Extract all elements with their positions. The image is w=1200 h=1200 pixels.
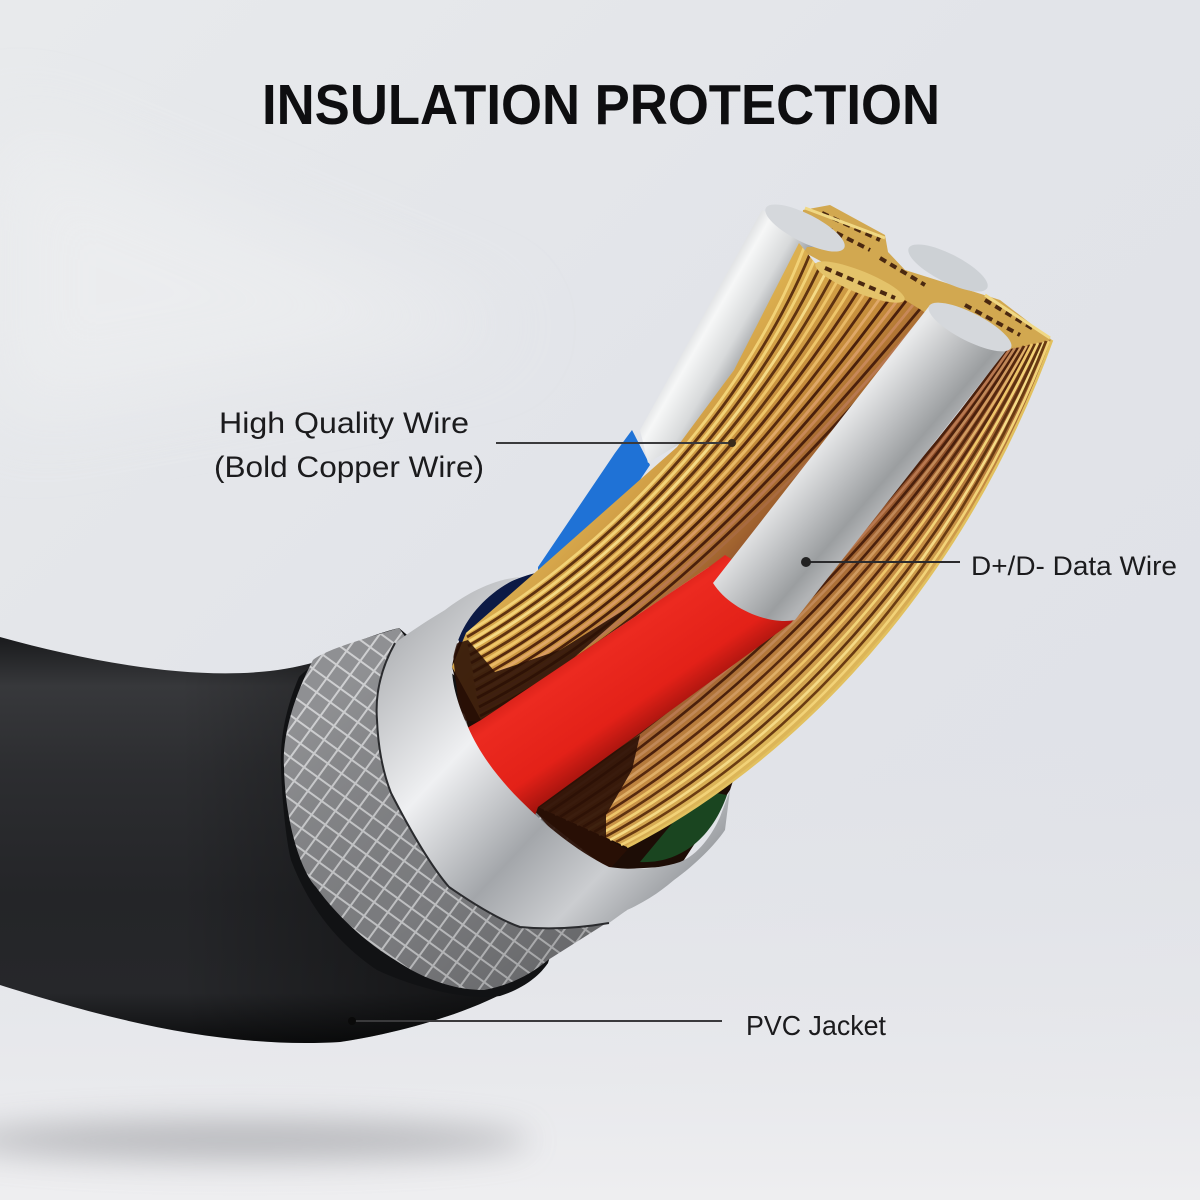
- dark ring behind braid: [281, 628, 600, 997]
- blue wire: [538, 430, 650, 580]
- cable illustration: [0, 196, 1052, 1043]
- rear silver conductor: [902, 236, 994, 300]
- silver collar front: [377, 577, 730, 928]
- PVC jacket: [0, 628, 548, 1043]
- dark shadow at opening: [452, 600, 640, 722]
- rear copper tips: [800, 205, 1052, 352]
- data wire silver conductor: [713, 294, 1017, 621]
- leader line: [806, 561, 960, 563]
- title: INSULATION PROTECTION: [262, 73, 940, 137]
- label: data wire: D+/D- Data Wire: [971, 551, 1177, 581]
- main copper bundle: high quality wire: [452, 243, 942, 722]
- front copper bundle: [530, 340, 1052, 870]
- red wire: [455, 555, 805, 830]
- upper silver conductor: [640, 196, 851, 463]
- cable opening: [452, 572, 740, 870]
- main bundle end cap: [811, 254, 909, 310]
- label: bold copper wire: (Bold Copper Wire): [214, 451, 484, 484]
- leader line: [496, 442, 732, 444]
- callout: data wire: [801, 551, 1177, 581]
- dark shadow at opening: [530, 735, 640, 870]
- metal braid shield: [284, 628, 627, 990]
- label: high quality wire: High Quality Wire: [219, 407, 469, 440]
- blue-black inner sleeve: [458, 572, 540, 650]
- leader line: [352, 1020, 722, 1022]
- callout: high quality wire: [214, 407, 736, 484]
- label: pvc jacket: PVC Jacket: [746, 1010, 886, 1041]
- callout: pvc jacket: [348, 1010, 886, 1041]
- green wire: [640, 790, 727, 862]
